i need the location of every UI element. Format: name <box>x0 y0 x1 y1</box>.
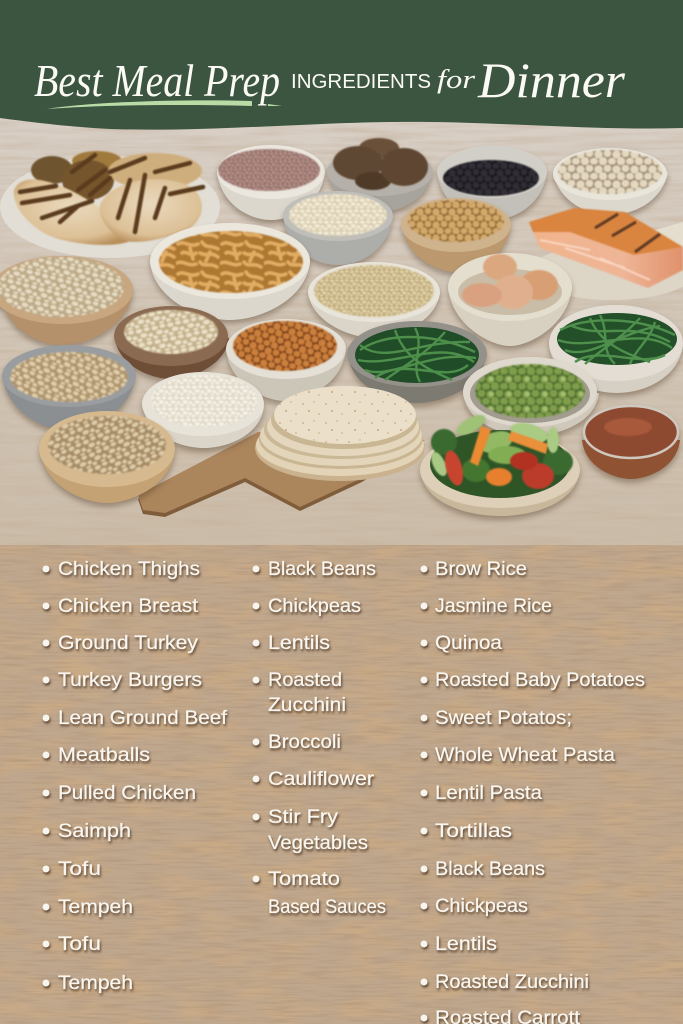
column 1: proteins: Tofu <box>58 933 101 955</box>
column 3: carbs: Lentil Pasta <box>435 782 542 804</box>
column 1: proteins <box>42 558 228 994</box>
ingredients list <box>42 558 645 1024</box>
cutting board <box>138 432 425 517</box>
column 3: carbs <box>420 558 645 1024</box>
column 2: beans and vegetables: Stir Fry <box>268 806 338 828</box>
panel: wooden table background <box>0 118 683 548</box>
dish: black beans bowl <box>437 146 547 220</box>
salad vegetables <box>428 411 573 489</box>
column 1: proteins: Turkey Burgers <box>58 669 202 691</box>
column 2: beans and vegetables: Black Beans <box>268 558 376 580</box>
column 2: beans and vegetables: Lentils <box>268 632 330 654</box>
column 2: beans and vegetables: Cauliflower <box>268 768 375 790</box>
dish: meatball bowl <box>448 253 572 346</box>
dish: white rice bowl <box>142 372 264 448</box>
column 3: carbs: Lentils <box>435 933 497 955</box>
dish: front oats bowl <box>39 411 175 503</box>
dish: small oats brown bowl <box>114 306 229 379</box>
column 2: beans and vegetables: Broccoli <box>268 731 341 753</box>
dish: oats wooden bowl <box>0 256 133 345</box>
dish: salad bowl <box>420 411 580 516</box>
column 3: carbs: Quinoa <box>435 632 502 654</box>
dish: grilled chicken plate <box>0 151 220 258</box>
dish: baked beans bowl <box>226 319 346 401</box>
column 2: beans and vegetables: Vegetables <box>268 832 368 854</box>
title: for: for <box>437 65 476 94</box>
column 3: carbs: Tortillas <box>435 820 512 842</box>
dish: center green beans bowl <box>347 321 487 403</box>
column 3: carbs: Whole Wheat Pasta <box>435 744 615 766</box>
column 1: proteins: Chicken Thighs <box>58 558 200 580</box>
dish: rice bowl <box>283 191 393 265</box>
column 1: proteins: Meatballs <box>58 744 150 766</box>
dish: mushrooms bowl <box>327 138 433 212</box>
column 1: proteins: Ground Turkey <box>58 632 198 654</box>
title <box>34 52 626 108</box>
dish: pasta bowl <box>150 223 310 320</box>
column 3: carbs: Black Beans <box>435 858 545 880</box>
column 1: proteins: Tempeh <box>58 972 133 994</box>
plate <box>529 244 683 300</box>
column 2: beans and vegetables <box>252 558 386 918</box>
dish: gray bowl of oats <box>2 345 136 431</box>
dish: ground turkey bowl <box>217 145 325 220</box>
broccoli florets <box>475 364 585 418</box>
column 2: beans and vegetables: Zucchini <box>268 694 346 716</box>
column 1: proteins: Lean Ground Beef <box>58 707 228 729</box>
column 2: beans and vegetables: Chickpeas <box>268 595 361 617</box>
plate <box>0 156 220 258</box>
column 3: carbs: Chickpeas <box>435 895 528 917</box>
column 3: carbs: Roasted Baby Potatoes <box>435 669 645 691</box>
dish: broccoli bowl <box>463 357 599 436</box>
column 1: proteins: Saimph <box>58 820 131 842</box>
green bean strands <box>358 328 476 382</box>
title underline <box>47 100 282 109</box>
dish: quinoa bowl <box>308 262 440 338</box>
dish: white beans bowl <box>553 148 668 215</box>
dish: chickpeas wooden bowl <box>401 198 511 272</box>
panel: header banner <box>0 0 683 130</box>
column 3: carbs: Jasmine Rice <box>435 595 552 617</box>
salmon fillet <box>529 208 683 288</box>
title: dinner: Dinner <box>477 52 626 108</box>
title: ingredients: INGREDIENTS <box>291 71 431 93</box>
meatballs <box>462 254 558 309</box>
column 3: carbs: Sweet Potatos; <box>435 707 572 729</box>
column 1: proteins: Tempeh <box>58 896 133 918</box>
dish: salmon plate <box>529 208 683 300</box>
column 2: beans and vegetables: Tomato <box>268 868 340 890</box>
column 1: proteins: Chicken Breast <box>58 595 199 617</box>
cutting board corner <box>655 222 683 260</box>
chicken pieces <box>14 151 203 245</box>
dish: sauce glass bowl <box>582 406 680 479</box>
column 1: proteins: Pulled Chicken <box>58 782 196 804</box>
green bean strands <box>558 315 675 364</box>
column 2: beans and vegetables: Based Sauces <box>268 896 386 918</box>
column 3: carbs: Roasted Zucchini <box>435 971 589 993</box>
panel: ingredients list wood background <box>0 545 683 1024</box>
dish: tortilla stack <box>255 386 425 481</box>
dish: right green beans bowl <box>549 305 683 393</box>
column 2: beans and vegetables: Roasted <box>268 669 342 691</box>
title: script words: Best Meal Prep <box>34 55 280 106</box>
column 1: proteins: Tofu <box>58 858 101 880</box>
column 3: carbs: Brow Rice <box>435 558 527 580</box>
